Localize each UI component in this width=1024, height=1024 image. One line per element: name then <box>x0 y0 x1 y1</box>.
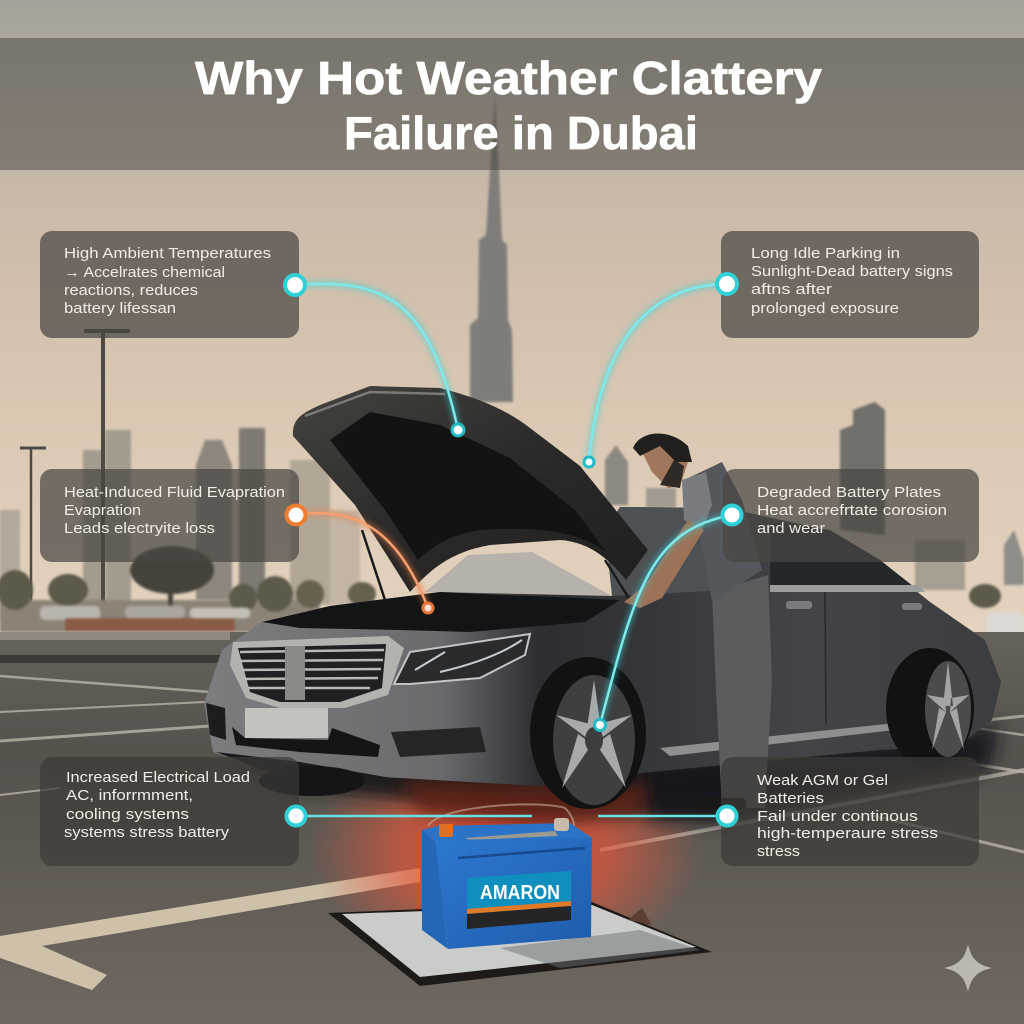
panel: weak AGM or gel batteries <box>721 757 979 866</box>
battery top <box>422 823 592 842</box>
panel: weak AGM or gel batteries: Batteries <box>757 790 824 807</box>
panel: fluid evaporation <box>40 469 299 562</box>
head <box>642 438 688 488</box>
panel: weak AGM or gel batteries: stress <box>757 843 800 860</box>
panel: long idle parking: prolonged exposure <box>751 300 899 317</box>
panel: long idle parking: aftns after <box>751 281 832 298</box>
sleeve <box>682 472 712 530</box>
panel: fluid evaporation: Leads electryite loss <box>64 520 215 537</box>
windshield <box>425 552 612 596</box>
roof behind hood <box>605 507 730 596</box>
hood bay <box>262 592 620 632</box>
panel: high ambient temperatures: High Ambient Temperatures <box>64 245 271 262</box>
panel: increased electrical load: AC, inforrmment, <box>66 787 193 804</box>
connector: idle parking to car <box>584 274 737 467</box>
connector: AGM batteries to battery <box>598 806 736 826</box>
panel: long idle parking <box>721 231 979 338</box>
trees and parked cars at the horizon <box>0 546 1024 636</box>
brand name: AMARON <box>480 882 560 904</box>
door seam <box>825 592 826 725</box>
panel: degraded battery plates <box>723 469 979 562</box>
icon: sparkle watermark <box>944 944 992 992</box>
panel: increased electrical load: cooling systems <box>66 806 189 823</box>
side sill <box>660 722 912 756</box>
panel: weak AGM or gel batteries: Weak AGM or Gel <box>757 772 888 789</box>
panel: weak AGM or gel batteries: high-temperaure stress <box>757 825 938 842</box>
title <box>195 52 822 159</box>
panel: degraded battery plates: and wear <box>757 520 825 537</box>
title band <box>0 38 1024 170</box>
battery label <box>467 871 571 909</box>
headlight <box>394 634 530 684</box>
panel: long idle parking: Long Idle Parking in <box>751 245 900 262</box>
panel: fluid evaporation: Heat-Induced Fluid Evapration <box>64 484 285 501</box>
car body <box>204 507 1001 786</box>
hood strut <box>362 530 630 600</box>
panel: increased electrical load: systems stress battery <box>64 824 230 841</box>
car shadow <box>230 740 990 812</box>
connector: battery plates to wheel <box>594 506 742 730</box>
panel: high ambient temperatures: battery lifessan <box>64 300 176 317</box>
open hood <box>293 386 648 592</box>
front wheel <box>530 657 646 809</box>
mechanic <box>624 433 772 810</box>
panel: high ambient temperatures: → Accelrates chemical <box>64 264 225 281</box>
parking bay corner marking <box>0 868 420 990</box>
panel: increased electrical load: Increased Electrical Load <box>66 769 250 786</box>
car <box>204 386 1001 809</box>
connector: fluid evaporation to engine <box>286 506 433 613</box>
car side windows <box>770 522 918 590</box>
battery cable loop <box>428 804 574 826</box>
connector: ambient temperatures to hood <box>285 275 464 436</box>
panel: high ambient temperatures <box>40 231 299 338</box>
panel: increased electrical load <box>40 757 299 866</box>
grille <box>230 636 404 708</box>
lamp posts <box>20 330 130 630</box>
background sky <box>0 0 1024 640</box>
heat glow around battery <box>310 725 700 975</box>
connector: electrical load to battery <box>286 806 532 826</box>
arm <box>624 520 704 608</box>
panel: degraded battery plates: Heat accrefrtate corosion <box>757 502 947 519</box>
city skyline <box>0 402 1024 620</box>
battery front <box>435 838 592 949</box>
title: Failure in Dubai <box>344 107 698 159</box>
parking lines <box>0 676 1024 852</box>
title: Why Hot Weather Clattery <box>195 52 822 104</box>
panel: fluid evaporation: Evapration <box>64 502 141 519</box>
panel: high ambient temperatures: reactions, reduces <box>64 282 198 299</box>
lower lip <box>216 752 391 778</box>
rear wheel <box>886 648 974 768</box>
panel: long idle parking: Sunlight-Dead battery signs <box>751 263 953 280</box>
battery <box>422 804 592 949</box>
asphalt ground <box>0 632 1024 1024</box>
panel: weak AGM or gel batteries: Fail under continous <box>757 808 918 825</box>
battery side <box>422 830 448 949</box>
insulating mat <box>328 902 712 986</box>
panel: degraded battery plates: Degraded Battery Plates <box>757 484 941 501</box>
door handles <box>786 601 812 609</box>
license plate <box>245 708 328 738</box>
Burj Khalifa tower <box>470 95 513 402</box>
legs <box>712 575 772 808</box>
boots <box>696 798 746 810</box>
terminals <box>439 824 453 837</box>
lower air intake <box>232 727 380 757</box>
torso <box>684 462 762 602</box>
